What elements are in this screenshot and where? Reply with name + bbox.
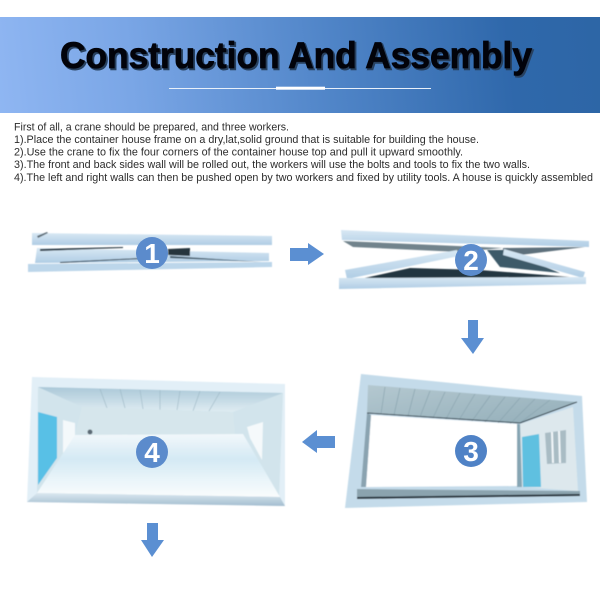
intro text block: 1).Place the container house frame on a dry,lat,solid ground that is suitable for building the house. [14, 134, 479, 146]
header banner [0, 17, 600, 113]
intro text block: 3).The front and back sides wall will be rolled out, the workers will use the bolts and tools to fix the two walls. [14, 159, 530, 171]
intro text block [14, 122, 593, 184]
title: Construction And Assembly [60, 35, 532, 76]
badge 4: 4 [144, 437, 160, 468]
step 3: container with roof and right wall [345, 374, 587, 508]
badge 1 [136, 237, 168, 269]
badge 2 [455, 244, 487, 276]
arrow: step 1 to 2 [290, 243, 324, 265]
step 2: lifting container [339, 230, 589, 289]
title underline [169, 87, 431, 90]
step 1: folded container [28, 232, 272, 272]
badge 1: 1 [144, 238, 160, 269]
arrow: step 3 to 4 [302, 430, 335, 453]
badge 2: 2 [463, 245, 479, 276]
title: Construction And Assembly [62, 36, 534, 78]
intro text block: 2).Use the crane to fix the four corners of the container house top and pull it upward smoothly. [14, 146, 463, 158]
intro text block: First of all, a crane should be prepared, and three workers. [14, 122, 289, 134]
badge 4 [136, 436, 168, 468]
badge 3: 3 [463, 436, 479, 467]
arrow: step 2 to 3 [461, 320, 484, 354]
badge 3 [455, 435, 487, 467]
intro text block: 4).The left and right walls can then be pushed open by two workers and fixed by utility tools. A house is quickly assembled [14, 172, 593, 184]
arrow: down from step 4 [141, 523, 164, 557]
step 4: fully opened container [27, 377, 285, 506]
